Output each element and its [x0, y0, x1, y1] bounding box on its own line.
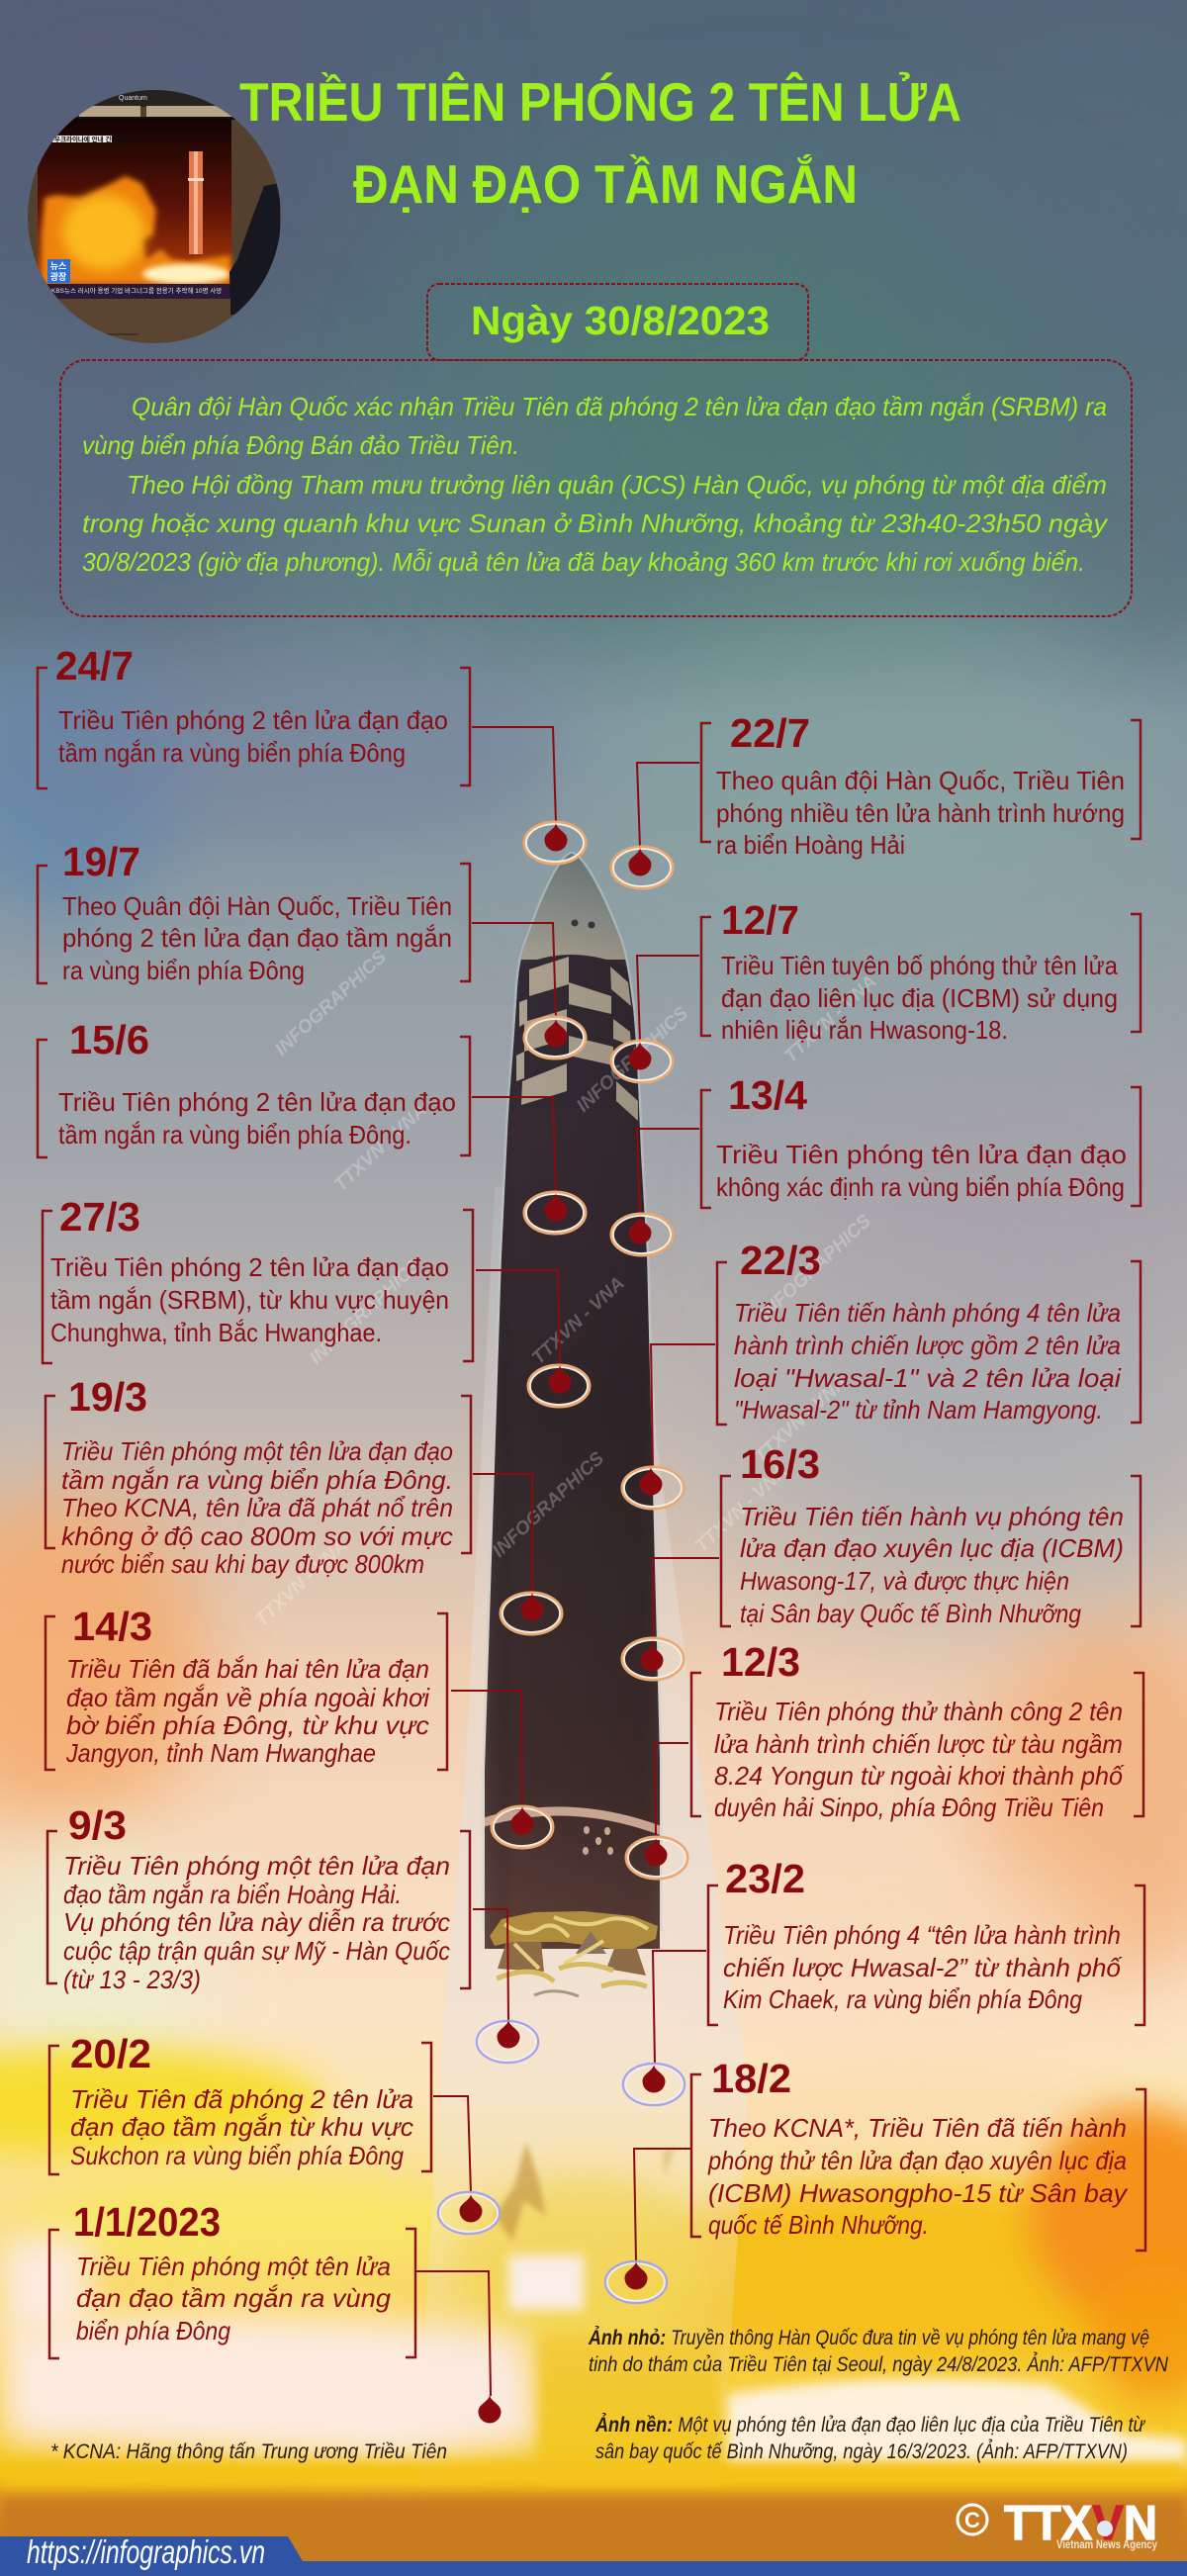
event 13/4: 13/4 — [728, 1072, 807, 1118]
event 9/3: cuộc tập trận quân sự Mỹ - Hàn Quốc — [63, 1936, 450, 1966]
engine nozzles — [490, 1911, 658, 1996]
event 22/7: phóng nhiều tên lửa hành trình hướng — [716, 798, 1125, 828]
event 18/2: (ICBM) Hwasongpho-15 từ Sân bay — [708, 2178, 1129, 2208]
event 27/3: Triều Tiên phóng 2 tên lửa đạn đạo — [50, 1252, 449, 1282]
event 19/7: phóng 2 tên lửa đạn đạo tầm ngắn — [62, 923, 452, 953]
event 22/7: Theo quân đội Hàn Quốc, Triều Tiên — [716, 766, 1125, 795]
watermarks: TTXVN - VNA — [528, 1273, 629, 1369]
inset photo: TV broadcast of launch: Quantum — [119, 95, 147, 102]
event 19/3: tầm ngắn ra vùng biển phía Đông. — [61, 1465, 453, 1495]
photo caption: background — [594, 2414, 1145, 2463]
event 1/1/2023: Triều Tiên phóng một tên lửa — [76, 2252, 391, 2281]
event 14/3: 14/3 — [72, 1604, 152, 1649]
watermarks: TTXVN - VNA — [251, 1535, 352, 1631]
event 15/6: tầm ngắn ra vùng biển phía Đông. — [58, 1120, 411, 1150]
event 23/2 — [623, 1856, 1144, 2105]
event 12/7: Triều Tiên tuyên bố phóng thử tên lửa — [721, 951, 1118, 980]
event 27/3: Chunghwa, tỉnh Bắc Hwanghae. — [50, 1318, 382, 1347]
event 19/7: 19/7 — [62, 839, 140, 884]
event 13/4: không xác định ra vùng biển phía Đông — [716, 1172, 1125, 1202]
event 13/4: Triều Tiên phóng tên lửa đạn đạo — [716, 1140, 1127, 1169]
watermarks: INFOGRAPHICS — [573, 1003, 692, 1117]
event 14/3: đạo tầm ngắn về phía ngoài khơi — [66, 1683, 430, 1712]
rocket — [475, 851, 673, 1996]
footnote: KCNA: * KCNA: Hãng thông tấn Trung ương Triều Tiên — [50, 2440, 447, 2463]
event 20/2: 20/2 — [70, 2031, 151, 2076]
event 24/7 — [38, 643, 586, 864]
event 19/3: không ở độ cao 800m so với mực — [61, 1521, 453, 1551]
event 19/7: Theo Quân đội Hàn Quốc, Triều Tiên — [62, 891, 452, 921]
title: TRIỀU TIÊN PHÓNG 2 TÊN LỬA — [239, 71, 961, 133]
event 12/7: đạn đạo liên lục địa (ICBM) sử dụng — [721, 983, 1118, 1013]
event 12/3: 8.24 Yongun từ ngoài khơi thành phố — [714, 1761, 1125, 1791]
event 24/7: tầm ngắn ra vùng biển phía Đông — [58, 738, 406, 768]
watermarks: INFOGRAPHICS — [489, 1448, 608, 1562]
title — [239, 71, 961, 215]
event 24/7: Triều Tiên phóng 2 tên lửa đạn đạo — [58, 705, 448, 735]
event 12/3: 12/3 — [721, 1639, 800, 1685]
inset photo: TV broadcast of launch: 뉴스 — [50, 261, 66, 271]
event 19/3: nước biển sau khi bay được 800km — [61, 1549, 424, 1579]
watermarks — [251, 947, 881, 1631]
flame light beam — [415, 1187, 749, 2503]
event 19/3: Theo KCNA, tên lửa đã phát nổ trên — [61, 1493, 453, 1522]
event 15/6: 15/6 — [69, 1017, 149, 1062]
event 16/3 — [622, 1441, 1141, 1680]
inset photo: TV broadcast of launch — [28, 90, 281, 344]
event 15/6 — [38, 1017, 586, 1234]
event 1/1/2023: đạn đạo tầm ngắn ra vùng — [76, 2283, 392, 2313]
event 15/6: Triều Tiên phóng 2 tên lửa đạn đạo — [58, 1087, 456, 1117]
event 20/2 — [49, 2031, 500, 2234]
footer band with URL: https://infographics.vn — [27, 2533, 265, 2570]
inset photo: TV broadcast of launch: 우크라이나에 안내 긴급 경보 — [54, 135, 131, 143]
intro panel: Theo Hội đồng Tham mưu trưởng liên quân (JCS) Hàn Quốc, vụ phóng từ một địa điểm — [127, 470, 1107, 500]
event 20/2: Sukchon ra vùng biển phía Đông — [70, 2141, 404, 2170]
event 22/3: loại "Hwasal-1" và 2 tên lửa loại — [734, 1363, 1122, 1393]
event 27/3 — [43, 1194, 590, 1407]
event 19/3: Triều Tiên phóng một tên lửa đạn đạo — [61, 1436, 453, 1466]
event 18/2: 18/2 — [711, 2056, 791, 2101]
event 14/3: Triều Tiên đã bắn hai tên lửa đạn — [66, 1654, 429, 1684]
event 18/2: phóng thử tên lửa đạn đạo xuyên lục địa — [707, 2146, 1127, 2175]
event 19/3 — [46, 1374, 562, 1634]
event 20/2: đạn đạo tầm ngắn từ khu vực — [70, 2112, 413, 2142]
event 9/3: 9/3 — [68, 1802, 127, 1848]
watermarks: INFOGRAPHICS — [271, 947, 391, 1060]
logo: TTXVN: TTXVN — [1004, 2497, 1157, 2550]
flame debris below rocket — [495, 2142, 675, 2241]
event 16/3: 16/3 — [740, 1441, 820, 1487]
watermarks: INFOGRAPHICS — [306, 1255, 425, 1369]
event 12/3: lửa hành trình chiến lược từ tàu ngầm — [714, 1729, 1123, 1759]
event 22/3: Triều Tiên tiến hành phóng 4 tên lửa — [734, 1298, 1121, 1328]
event 20/2: Triều Tiên đã phóng 2 tên lửa — [70, 2084, 413, 2114]
date box: Ngày 30/8/2023 — [471, 298, 770, 343]
event 9/3: (từ 13 - 23/3) — [63, 1965, 201, 1994]
event 23/2: Kim Chaek, ra vùng biển phía Đông — [723, 1984, 1082, 2014]
date box — [427, 284, 808, 360]
event 1/1/2023 — [49, 2199, 501, 2424]
event 22/3: "Hwasal-2" từ tỉnh Nam Hamgyong. — [734, 1395, 1103, 1425]
event 22/7 — [611, 710, 1141, 888]
event 22/3: hành trình chiến lược gồm 2 tên lửa — [734, 1331, 1121, 1360]
event 27/3: tầm ngắn (SRBM), từ khu vực huyện — [50, 1285, 449, 1315]
event 18/2: Theo KCNA*, Triều Tiên đã tiến hành — [708, 2113, 1127, 2143]
footer band with URL — [0, 2533, 1187, 2576]
logo: TTXVN: C — [964, 2508, 980, 2532]
logo: TTXVN: Vietnam News Agency — [1056, 2537, 1157, 2551]
event 23/2: Triều Tiên phóng 4 “tên lửa hành trình — [723, 1920, 1121, 1950]
event 16/3: Triều Tiên tiến hành vụ phóng tên — [740, 1502, 1124, 1531]
title: ĐẠN ĐẠO TẦM NGẮN — [353, 153, 858, 215]
inset photo: TV broadcast of launch: KBS뉴스 러시아 용병 기업 바그너그룹 전용기 추락해 10명 사망 — [51, 286, 222, 295]
event 12/3: duyên hải Sinpo, phía Đông Triều Tiên — [714, 1793, 1104, 1822]
event 22/3: 22/3 — [740, 1238, 821, 1283]
event 27/3: 27/3 — [59, 1194, 140, 1240]
event 1/1/2023: 1/1/2023 — [73, 2199, 221, 2245]
event 19/7: ra vùng biển phía Đông — [62, 956, 305, 985]
watermarks: TTXVN - VNA — [330, 1100, 431, 1196]
event 14/3: Jangyon, tỉnh Nam Hwanghae — [65, 1738, 376, 1768]
intro panel: 30/8/2023 (giờ địa phương). Mỗi quả tên lửa đã bay khoảng 360 km trước khi rơi xuống biển. — [82, 547, 1085, 577]
watermarks: INFOGRAPHICS — [756, 1211, 875, 1325]
event 24/7: 24/7 — [55, 643, 134, 689]
event 12/7: 12/7 — [721, 897, 799, 943]
event 9/3: Vụ phóng tên lửa này diễn ra trước — [63, 1907, 450, 1937]
event 18/2: quốc tế Bình Nhưỡng. — [708, 2210, 929, 2240]
event 19/3: 19/3 — [68, 1374, 147, 1420]
event 22/3 — [622, 1238, 1141, 1509]
intro panel — [60, 360, 1132, 616]
event 9/3: Triều Tiên phóng một tên lửa đạn — [63, 1851, 450, 1881]
event 14/3 — [46, 1604, 553, 1848]
event 23/2: 23/2 — [725, 1856, 805, 1901]
event 14/3: bờ biển phía Đông, từ khu vực — [66, 1710, 429, 1740]
event 23/2: chiến lược Hwasal-2” từ thành phố — [723, 1953, 1124, 1982]
intro panel: Quân đội Hàn Quốc xác nhận Triều Tiên đã phóng 2 tên lửa đạn đạo tầm ngắn (SRBM) ra — [132, 392, 1107, 421]
event 13/4 — [611, 1072, 1141, 1255]
event 12/3 — [626, 1639, 1143, 1879]
event 22/7: ra biển Hoàng Hải — [716, 830, 905, 860]
event 12/7: nhiên liệu rắn Hwasong-18. — [721, 1015, 1008, 1045]
event 16/3: tại Sân bay Quốc tế Bình Nhưỡng — [740, 1599, 1081, 1628]
event 19/7 — [38, 839, 586, 1058]
intro panel: vùng biển phía Đông Bán đảo Triều Tiên. — [82, 430, 519, 460]
inset photo: TV broadcast of launch: 광장 — [50, 271, 67, 282]
watermarks: TTXVN - VNA — [751, 1372, 852, 1468]
watermarks: TTXVN - VNA — [780, 971, 881, 1067]
event 12/3: Triều Tiên phóng thử thành công 2 tên — [714, 1697, 1123, 1726]
event 22/7: 22/7 — [730, 710, 810, 756]
event 9/3: đạo tầm ngắn ra biển Hoàng Hải. — [63, 1880, 402, 1909]
event 18/2 — [605, 2056, 1145, 2303]
watermarks: TTXVN - VNA — [691, 1461, 792, 1557]
event 9/3 — [47, 1802, 538, 2063]
event 12/7 — [611, 897, 1141, 1082]
event 16/3: Hwasong-17, và được thực hiện — [740, 1566, 1069, 1596]
photo caption: inset — [588, 2327, 1169, 2376]
event 1/1/2023: biển phía Đông — [76, 2316, 230, 2346]
event 16/3: lửa đạn đạo xuyên lục địa (ICBM) — [740, 1533, 1124, 1563]
intro panel: trong hoặc xung quanh khu vực Sunan ở Bình Nhưỡng, khoảng từ 23h40-23h50 ngày — [82, 508, 1109, 538]
